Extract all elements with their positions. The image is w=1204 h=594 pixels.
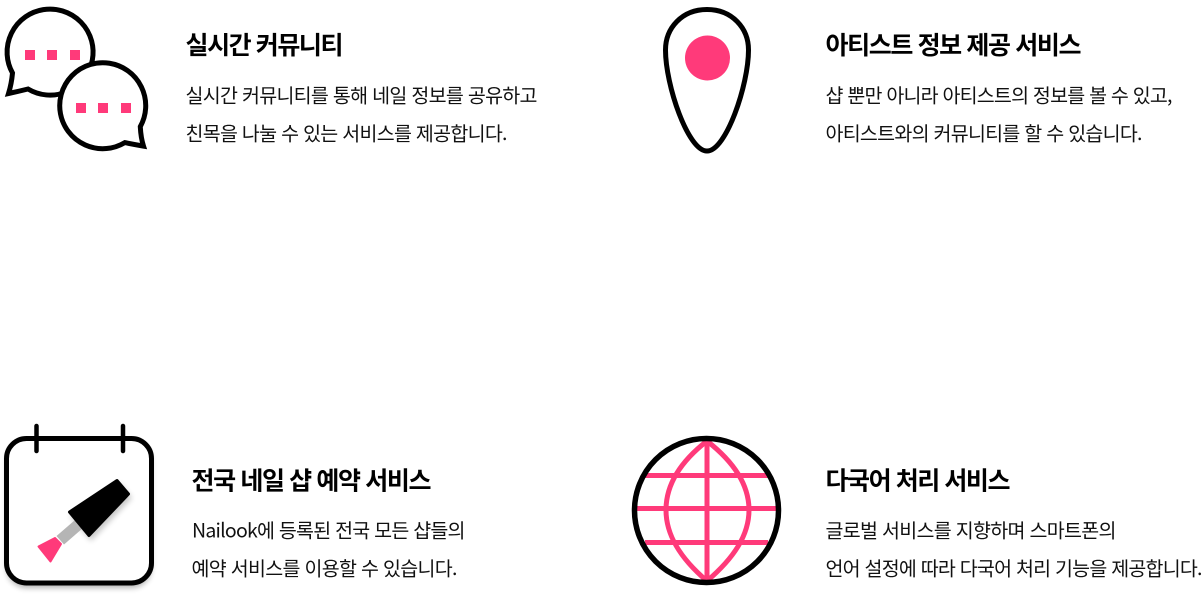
- heading: nail shop reservation: 전국 네일 샵 예약 서비스: [192, 462, 432, 498]
- text: nail shop reservation description: Nailook에 등록된 전국 모든 샵들의: [192, 514, 466, 544]
- panel: nail shop reservation: [6, 426, 466, 588]
- panel: multi-language support: [634, 438, 1202, 582]
- text: real-time community description: 친목을 나눌 수 있는 서비스를 제공합니다.: [186, 118, 508, 146]
- text: artist information description: [826, 80, 1172, 146]
- heading: artist information: 아티스트 정보 제공 서비스: [826, 26, 1082, 62]
- text: multi-language support description: [826, 514, 1202, 582]
- text: real-time community description: [186, 80, 538, 146]
- text: nail shop reservation description: 예약 서비스를 이용할 수 있습니다.: [192, 552, 458, 582]
- icon: calendar with nail brush: [6, 426, 152, 588]
- text: multi-language support description: 언어 설정에 따라 다국어 처리 기능을 제공합니다.: [826, 552, 1202, 582]
- heading: real-time community: 실시간 커뮤니티: [186, 26, 344, 62]
- icon: globe: [634, 438, 778, 582]
- heading: multi-language support: 다국어 처리 서비스: [826, 462, 1010, 498]
- panel: artist information: [666, 10, 1172, 151]
- text: artist information description: 아티스트와의 커뮤니티를 할 수 있습니다.: [826, 118, 1142, 146]
- panel: real-time community: [7, 9, 538, 149]
- icon: speech bubbles: [7, 9, 146, 149]
- text: real-time community description: 실시간 커뮤니티를 통해 네일 정보를 공유하고: [186, 80, 538, 108]
- icon: map pin: [666, 10, 748, 151]
- text: multi-language support description: 글로벌 서비스를 지향하며 스마트폰의: [826, 514, 1116, 544]
- text: artist information description: 샵 뿐만 아니라 아티스트의 정보를 볼 수 있고,: [826, 80, 1172, 108]
- text: nail shop reservation description: [192, 514, 466, 582]
